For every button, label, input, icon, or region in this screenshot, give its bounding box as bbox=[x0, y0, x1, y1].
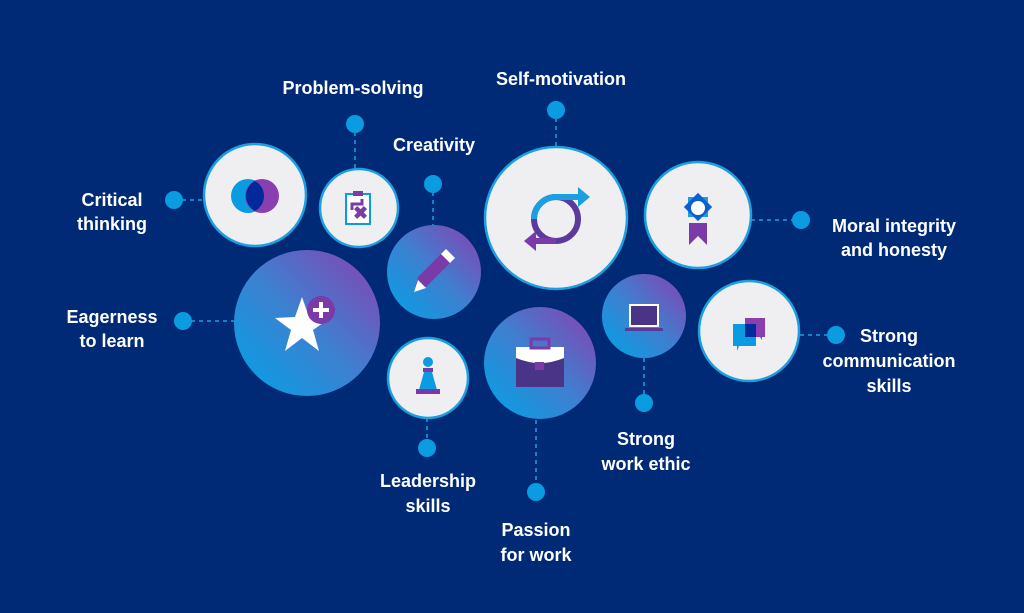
node: communication: Strong bbox=[860, 326, 918, 346]
node: passion for work: for work bbox=[500, 545, 572, 565]
node: creativity bbox=[387, 135, 481, 319]
node: communication: communication bbox=[822, 351, 956, 371]
node: critical thinking: thinking bbox=[77, 214, 147, 234]
node: passion for work bbox=[484, 307, 596, 565]
node: self-motivation: Self-motivation bbox=[496, 69, 626, 89]
node: self-motivation bbox=[485, 69, 627, 289]
node: strong work ethic bbox=[600, 274, 691, 474]
node: critical thinking: Critical bbox=[81, 190, 143, 210]
node: problem-solving: Problem-solving bbox=[282, 78, 424, 98]
node: leadership bbox=[380, 338, 476, 516]
node: problem-solving bbox=[282, 78, 424, 247]
node: eagerness to learn bbox=[66, 250, 380, 396]
node: moral integrity: and honesty bbox=[841, 240, 947, 260]
node: communication: skills bbox=[866, 376, 912, 396]
node: passion for work: Passion bbox=[501, 520, 571, 540]
node: leadership: skills bbox=[405, 496, 451, 516]
node: critical thinking bbox=[77, 144, 306, 246]
node: moral integrity: Moral integrity bbox=[832, 216, 956, 236]
node: leadership: Leadership bbox=[380, 471, 476, 491]
node: communication bbox=[699, 281, 956, 396]
node: strong work ethic: Strong bbox=[617, 429, 675, 449]
node: creativity: Creativity bbox=[393, 135, 475, 155]
node: strong work ethic: work ethic bbox=[600, 454, 691, 474]
node: eagerness to learn: to learn bbox=[79, 331, 145, 351]
node: eagerness to learn: Eagerness bbox=[66, 307, 158, 327]
node: moral integrity bbox=[645, 162, 956, 268]
node: problem-solving: ✖ bbox=[353, 203, 368, 223]
